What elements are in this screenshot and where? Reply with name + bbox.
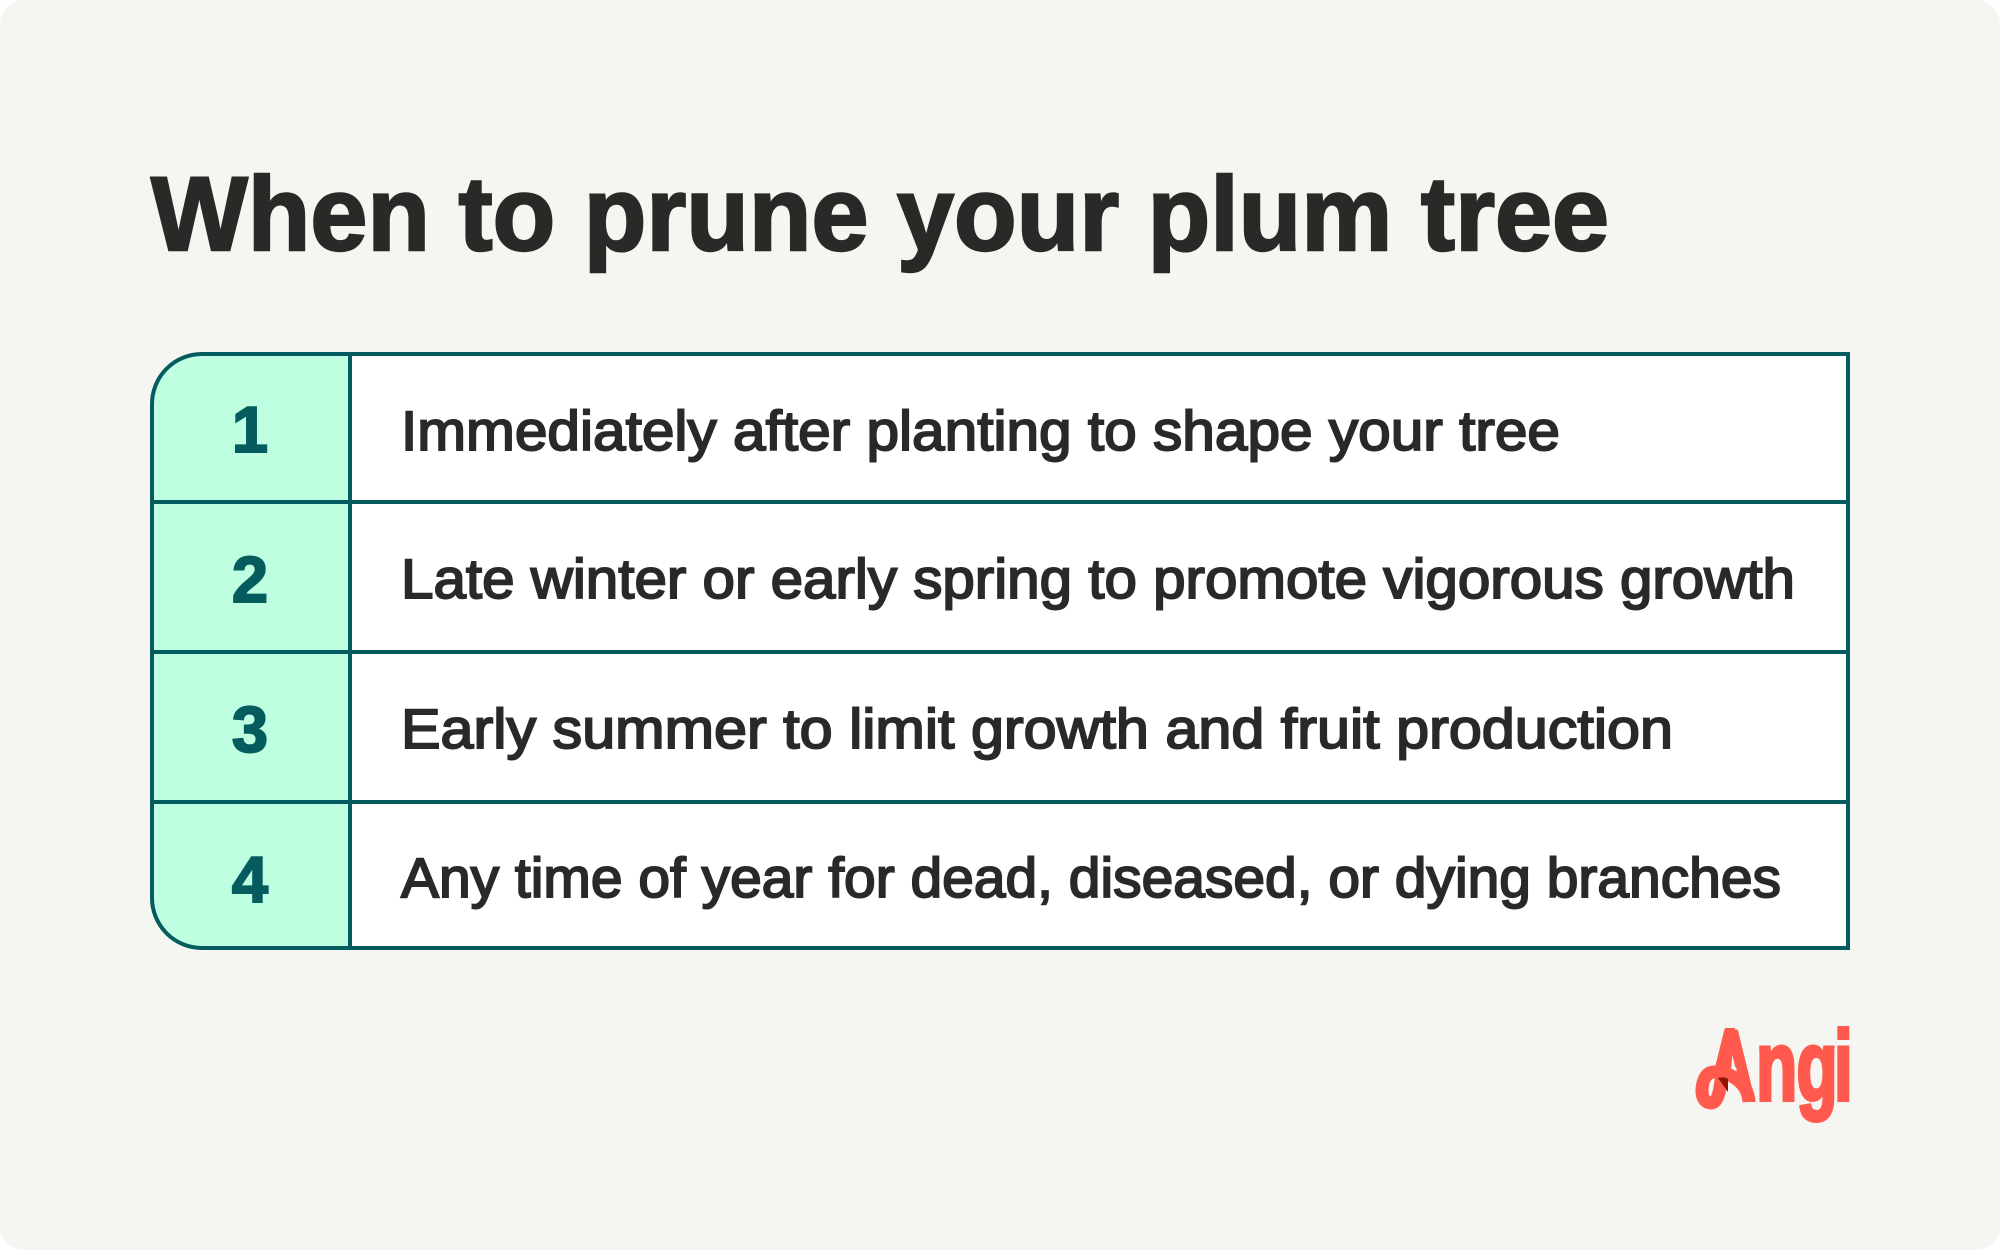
table: pruning times [152,354,1848,948]
row 1 text: Immediately after planting to shape your tree [401,399,1560,462]
row 4 [232,843,1781,916]
title: When to prune your plum tree [151,156,1609,273]
row 3 [232,693,1673,766]
number 2: 2 [232,543,268,616]
number 4: 4 [232,843,268,916]
row 1 [232,393,1560,466]
logo: Angi: Angi [1707,1010,1853,1121]
number 3: 3 [232,693,268,766]
row 3 text: Early summer to limit growth and fruit production [401,697,1673,760]
row 4 text: Any time of year for dead, diseased, or dying branches [401,846,1781,909]
number 1: 1 [232,393,268,466]
row 2 [232,543,1795,616]
row 2 text: Late winter or early spring to promote vigorous growth [401,547,1795,610]
